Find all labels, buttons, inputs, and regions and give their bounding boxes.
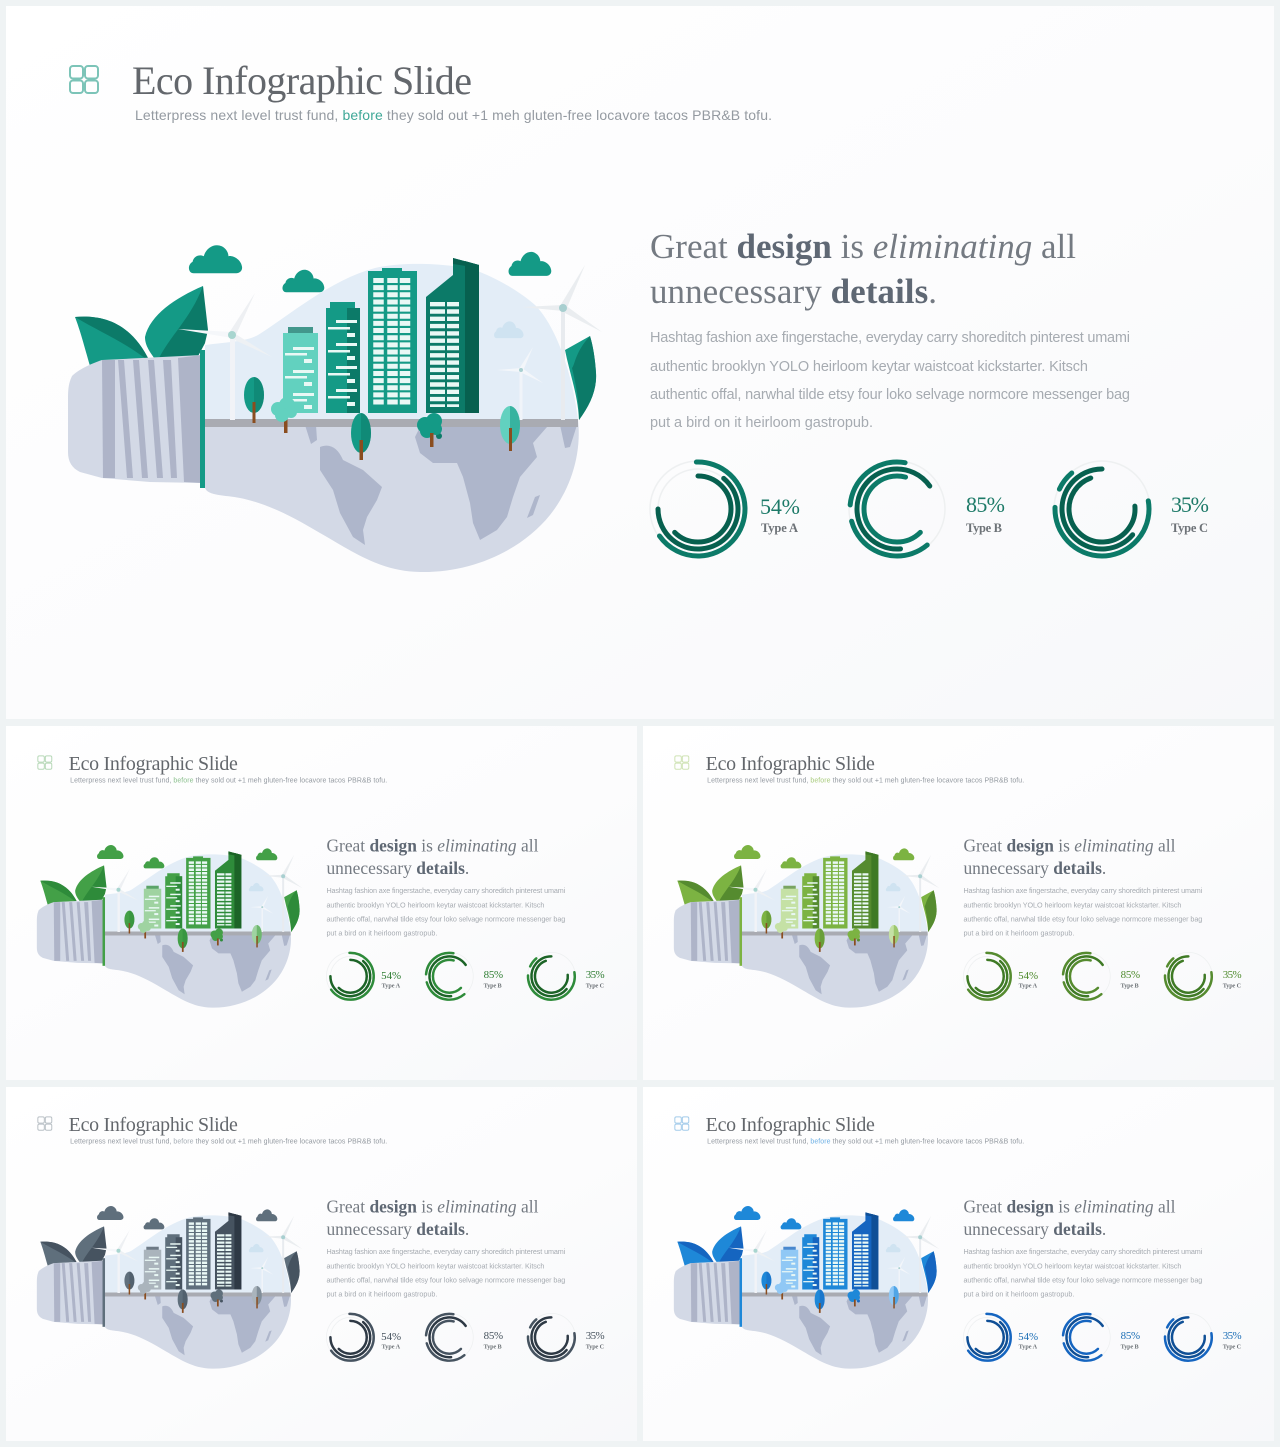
slide: green	[6, 726, 637, 1080]
labels: 35%	[1223, 1330, 1242, 1342]
slide: lime	[643, 726, 1274, 1080]
wind turbine left	[178, 293, 272, 420]
body text: put a bird on it heirloom gastropub.	[326, 1289, 437, 1298]
body text: Hashtag fashion axe fingerstache, everyday carry shoreditch pinterest umami	[650, 330, 1130, 346]
labels: Type B	[1121, 983, 1139, 990]
body text: Hashtag fashion axe fingerstache, everyday carry shoreditch pinterest umami	[326, 886, 566, 895]
cloud left	[189, 245, 242, 273]
illustration: eco light bulb	[37, 845, 303, 1008]
label 54% Type A: Type A	[761, 521, 798, 535]
building 2	[326, 302, 360, 413]
body text: authentic offal, narwhal tilde etsy four loko selvage normcore messenger bag	[650, 387, 1130, 403]
labels: 85%	[484, 1330, 503, 1342]
label 85% Type B	[966, 492, 1005, 535]
label 54% Type A: 54%	[760, 494, 800, 519]
body text: put a bird on it heirloom gastropub.	[963, 928, 1074, 937]
title: Eco Infographic Slide	[706, 753, 875, 775]
heading: Great design is eliminating all	[963, 835, 1176, 855]
body text: authentic brooklyn YOLO heirloom keytar waistcoat kickstarter. Kitsch	[326, 901, 544, 910]
labels: Type C	[586, 983, 605, 990]
body text: Hashtag fashion axe fingerstache, everyday carry shoreditch pinterest umami	[326, 1247, 566, 1256]
building 3	[368, 268, 417, 413]
body text	[326, 1247, 566, 1298]
heading: unnecessary details.	[326, 858, 469, 878]
slide: slate	[6, 1087, 637, 1441]
icon: four squares	[38, 1117, 52, 1130]
subtitle: Letterpress next level trust fund, before they sold out +1 meh gluten-free locavore tacos PBR&B tofu.	[70, 1139, 387, 1146]
cloud middle	[283, 270, 324, 292]
heading: Great design is eliminating all	[650, 227, 1076, 266]
tree 1	[244, 377, 264, 423]
tree 5	[500, 406, 520, 451]
labels	[1018, 969, 1242, 990]
building 1	[283, 327, 318, 413]
donut charts	[642, 443, 1164, 575]
lamp cap	[68, 355, 202, 483]
heading: Great design is eliminating all	[326, 835, 539, 855]
label 54% Type A	[760, 494, 800, 535]
labels: 35%	[1223, 969, 1242, 981]
bulb sky	[205, 264, 578, 420]
labels: Type A	[1019, 983, 1038, 990]
labels: 85%	[484, 969, 503, 981]
body text: authentic brooklyn YOLO heirloom keytar waistcoat kickstarter. Kitsch	[650, 359, 1088, 375]
labels: 54%	[1018, 1331, 1038, 1343]
labels: 54%	[381, 970, 401, 982]
body text: authentic brooklyn YOLO heirloom keytar waistcoat kickstarter. Kitsch	[963, 1262, 1181, 1271]
continents	[305, 425, 577, 545]
heading: unnecessary details.	[963, 858, 1106, 878]
donut charts	[322, 943, 582, 1009]
icon: four squares	[70, 66, 98, 93]
labels: Type A	[382, 983, 401, 990]
illustration: eco light bulb	[674, 1206, 940, 1369]
labels: Type C	[1223, 983, 1242, 990]
tree 2	[271, 397, 297, 433]
subtitle: Letterpress next level trust fund, before they sold out +1 meh gluten-free locavore tacos PBR&B tofu.	[70, 778, 387, 785]
body text: put a bird on it heirloom gastropub.	[650, 415, 873, 431]
illustration: eco light bulb	[674, 845, 940, 1008]
labels	[381, 1330, 605, 1351]
cloud right	[509, 252, 551, 276]
label 35% Type C: Type C	[1171, 521, 1208, 535]
slide: blue	[643, 1087, 1274, 1441]
labels: Type A	[382, 1344, 401, 1351]
title: Eco Infographic Slide	[706, 1114, 875, 1136]
subtitle: Letterpress next level trust fund, before they sold out +1 meh gluten-free locavore tacos PBR&B tofu.	[707, 1139, 1024, 1146]
labels: 85%	[1121, 969, 1140, 981]
donut charts	[322, 1304, 582, 1370]
heading: Great design is eliminating all	[326, 1196, 539, 1216]
body text: put a bird on it heirloom gastropub.	[326, 928, 437, 937]
light cloud	[494, 321, 524, 338]
illustration: eco light bulb	[68, 245, 602, 572]
slide: teal main	[6, 6, 1274, 719]
building 4	[426, 258, 479, 413]
heading: Great design is eliminating all	[963, 1196, 1176, 1216]
label 85% Type B: Type B	[966, 521, 1002, 535]
donut charts	[959, 1304, 1219, 1370]
right leaf	[145, 286, 208, 362]
donut 85%	[831, 443, 963, 575]
labels: Type C	[586, 1344, 605, 1351]
teal bar	[200, 350, 205, 488]
heading	[963, 835, 1176, 878]
icon: four squares	[675, 1117, 689, 1130]
labels	[1018, 1330, 1242, 1351]
body text	[963, 886, 1203, 937]
body text: authentic offal, narwhal tilde etsy four loko selvage normcore messenger bag	[963, 1276, 1202, 1285]
title: Eco Infographic Slide	[69, 753, 238, 775]
labels: Type B	[1121, 1344, 1139, 1351]
donut 35%	[1040, 447, 1164, 571]
subtitle: Letterpress next level trust fund, before they sold out +1 meh gluten-free locavore tacos PBR&B tofu.	[707, 778, 1024, 785]
labels: 54%	[381, 1331, 401, 1343]
bulb globe ground	[205, 420, 579, 572]
labels: 54%	[1018, 970, 1038, 982]
body text: authentic offal, narwhal tilde etsy four loko selvage normcore messenger bag	[963, 915, 1202, 924]
labels: 35%	[586, 969, 605, 981]
heading: unnecessary details.	[963, 1219, 1106, 1239]
labels: 35%	[586, 1330, 605, 1342]
wind turbine right	[522, 265, 602, 420]
left leaf	[75, 317, 150, 366]
illustration: eco light bulb	[37, 1206, 303, 1369]
labels: 85%	[1121, 1330, 1140, 1342]
donut charts	[959, 943, 1219, 1009]
body text: authentic offal, narwhal tilde etsy four loko selvage normcore messenger bag	[326, 915, 565, 924]
heading: unnecessary details.	[326, 1219, 469, 1239]
labels: Type C	[1223, 1344, 1242, 1351]
labels	[381, 969, 605, 990]
labels: Type B	[484, 1344, 502, 1351]
subtitle: Letterpress next level trust fund, before they sold out +1 meh gluten-free locavore tacos PBR&B tofu.	[135, 107, 772, 123]
donut 54%	[642, 453, 754, 565]
lamp thread stripes	[102, 355, 202, 483]
body text: authentic brooklyn YOLO heirloom keytar waistcoat kickstarter. Kitsch	[326, 1262, 544, 1271]
heading	[963, 1196, 1176, 1239]
label 85% Type B: 85%	[966, 492, 1005, 517]
heading	[326, 835, 539, 878]
heading	[326, 1196, 539, 1239]
icon: four squares	[38, 756, 52, 769]
body text	[963, 1247, 1203, 1298]
body text	[326, 886, 566, 937]
icon: four squares	[675, 756, 689, 769]
tree 3	[351, 413, 371, 460]
heading: unnecessary details.	[650, 272, 937, 311]
label 35% Type C: 35%	[1171, 492, 1209, 517]
title: Eco Infographic Slide	[69, 1114, 238, 1136]
body text: authentic offal, narwhal tilde etsy four loko selvage normcore messenger bag	[326, 1276, 565, 1285]
body text: Hashtag fashion axe fingerstache, everyday carry shoreditch pinterest umami	[963, 1247, 1203, 1256]
ground line	[205, 419, 578, 427]
labels: Type B	[484, 983, 502, 990]
title: Eco Infographic Slide	[132, 58, 472, 103]
heading	[650, 227, 1076, 311]
wind turbine small	[497, 347, 543, 420]
right leaf on globe	[565, 336, 596, 420]
body text: put a bird on it heirloom gastropub.	[963, 1289, 1074, 1298]
tree 4	[417, 413, 442, 447]
body text: Hashtag fashion axe fingerstache, everyday carry shoreditch pinterest umami	[963, 886, 1203, 895]
body text: authentic brooklyn YOLO heirloom keytar waistcoat kickstarter. Kitsch	[963, 901, 1181, 910]
labels: Type A	[1019, 1344, 1038, 1351]
label 35% Type C	[1171, 492, 1209, 535]
body text	[650, 330, 1130, 431]
